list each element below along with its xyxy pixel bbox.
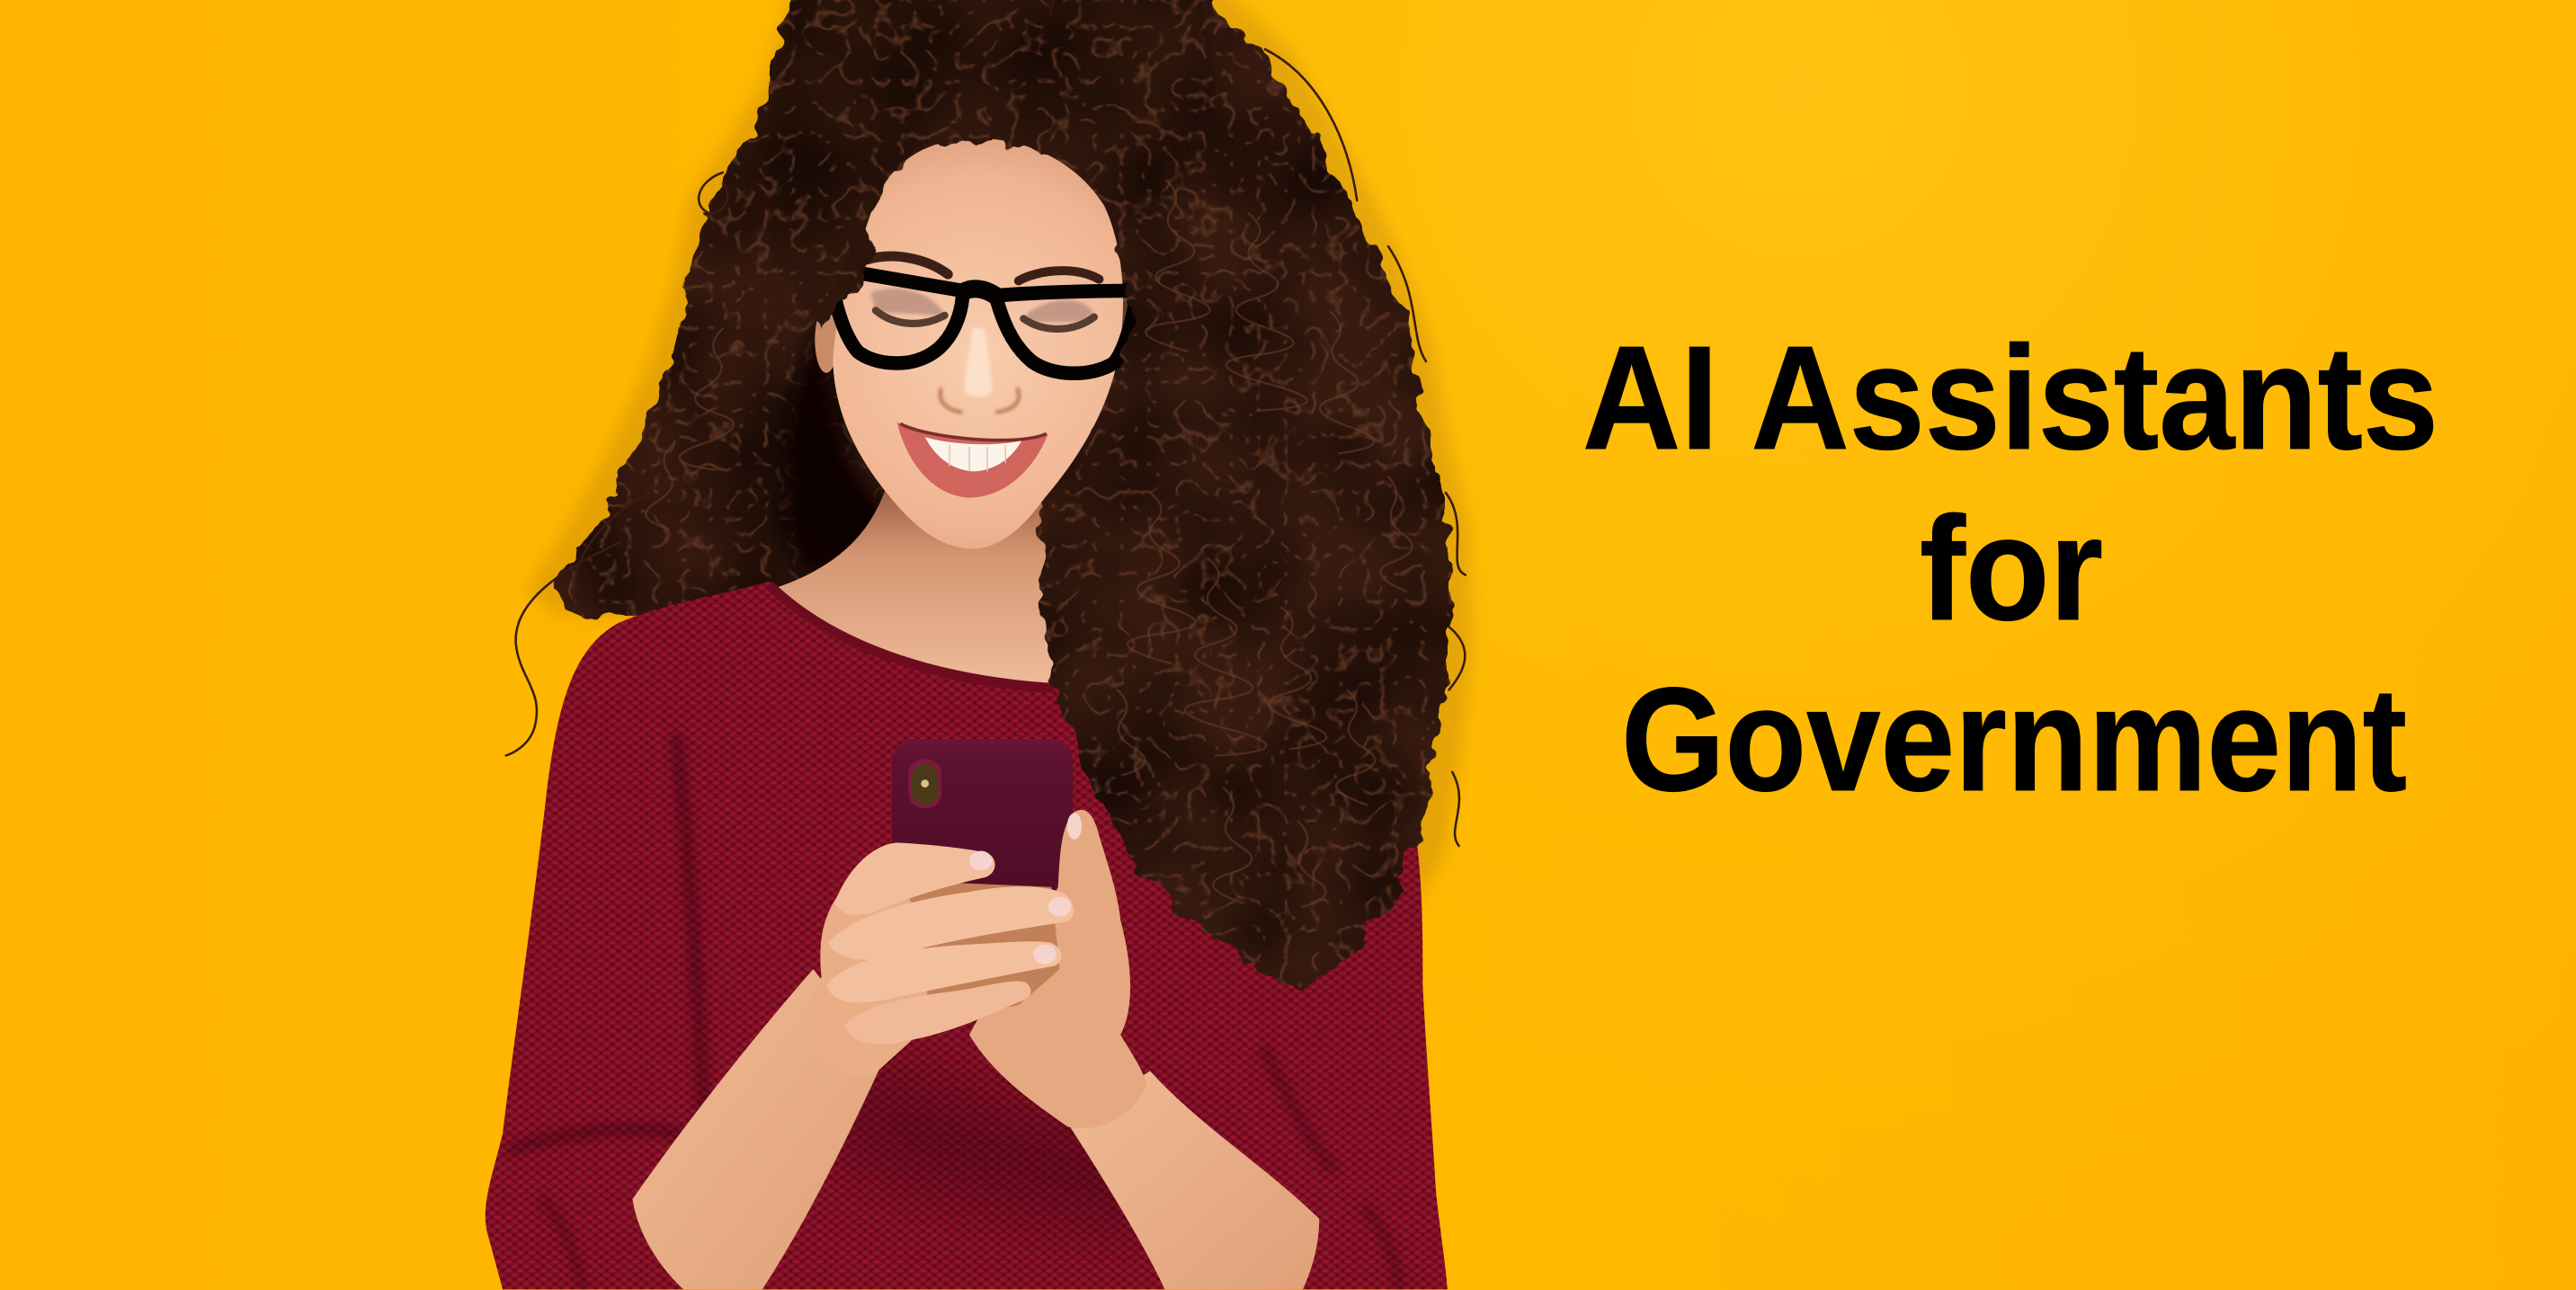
sweater [486,582,1448,1289]
photo: woman with glasses using a phone [486,0,1472,1289]
finger nails [969,813,1082,965]
back of left hand [804,854,930,1078]
ear [815,307,838,373]
neck [775,485,1061,685]
middle finger [828,886,1074,960]
title line 1: AI Assistants [1582,316,2438,480]
right forearm [1068,1071,1319,1289]
sweater shading [513,739,1400,1289]
face [815,138,1136,548]
nose highlight [965,328,993,397]
dark hair shadow beside the neck [783,312,912,578]
eyebrows [868,256,1099,280]
skin [833,138,1123,548]
right hand with thumb [969,810,1146,1128]
phone camera [908,759,941,808]
pinky [844,981,1031,1045]
curl strands [646,181,1413,907]
hair crown over forehead [756,0,1216,328]
sweater collar [769,584,1055,689]
ring finger [826,941,1062,1002]
back hair [556,0,1452,983]
eye lids and lashes [870,289,1094,329]
wispy curls [506,49,1466,846]
nose shadow [940,387,1019,413]
left forearm [632,969,884,1289]
index finger [834,842,995,915]
hands [804,810,1146,1128]
front hair falling over the sweater [1041,82,1452,989]
glasses [828,268,1136,373]
title line 2: for [1920,486,2103,651]
title line 3: Government [1621,657,2407,822]
title [1582,316,2438,822]
hair halo [526,0,1472,985]
phone [892,739,1073,912]
mouth [897,423,1048,498]
palm behind the fingers [862,879,1060,1031]
